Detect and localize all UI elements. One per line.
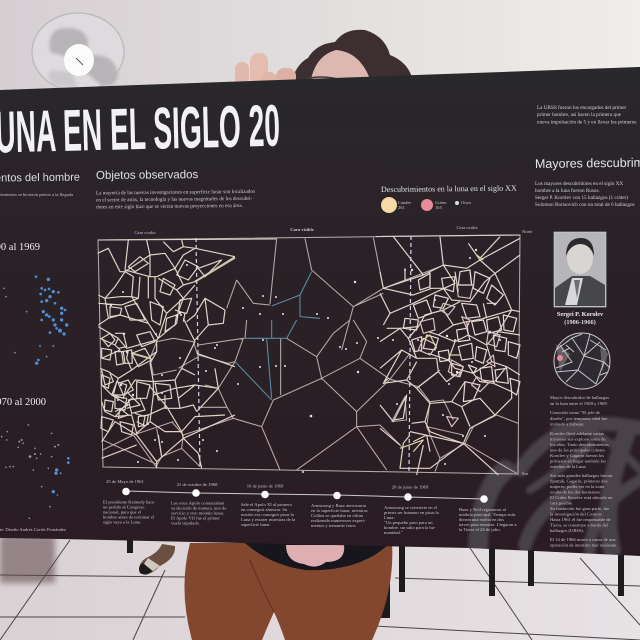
panel: right column, major discoveries (535, 104, 640, 548)
timeline event 4: mentos y tomando fotos. (311, 523, 356, 528)
person: head and hair (290, 30, 413, 85)
moon map labels: Cara visible (290, 227, 314, 232)
legend item landing: Lander (398, 200, 411, 205)
person: trousers (184, 543, 392, 640)
section paragraph: en el sector de atrás, la tecnología y las nuevas magnitudes de los descubri- (96, 196, 253, 203)
person: fingers over the board (235, 53, 296, 86)
right column body text: hallazgos (URSS). (550, 528, 584, 533)
right column body text: estudios de la Luna. (550, 464, 587, 469)
right column body text: los años. Tanto descubrimientos (550, 442, 609, 447)
timeline event 6: dieron una vuelta en dos (459, 517, 504, 522)
section heading: Objetos observados (96, 169, 199, 182)
legend: discoveries on the moon (381, 184, 517, 213)
timeline event 1: El presidente Kennedy hace (103, 500, 154, 504)
legend item crater: Cráter (435, 200, 447, 205)
background wall (0, 0, 640, 110)
timeline event 6: módulo principal. Tiempo más (459, 512, 516, 517)
right column body text: cara posible. (550, 500, 573, 506)
right column body text: misiones sus exploraciones de (550, 436, 606, 442)
section paragraph: La mayoría de las nuevas investigaciones en superficie lunar son localizados (96, 188, 255, 196)
right column body text: Korolev y Gagarin fueron los (550, 453, 604, 458)
panel: left column, lunar landings (0, 172, 80, 532)
timeline event 6: la Tierra el 24 de julio. (459, 527, 501, 532)
right column body text: invitado a trabajar. (550, 422, 584, 426)
floor (0, 530, 640, 640)
timeline event 3: Luna y extraer muestras de la (241, 517, 295, 522)
right column body text: Sus más grandes hallazgos fueron (550, 473, 613, 478)
timeline event 2: servicio y otro módulo lunar. (171, 510, 224, 516)
legend item landing: 261 (398, 205, 406, 210)
right column body text: El Cráter Korolev está ubicado en (550, 495, 613, 500)
right column body text: primeros en llegar también los (550, 458, 606, 464)
right column body text: operación de intestino mal realizada. (550, 542, 617, 548)
right column body text: mujeres, poder ver en la zona (550, 484, 604, 490)
timeline event 1 (103, 500, 155, 524)
globe of discoveries (554, 333, 610, 389)
dashed longitude lines (196, 236, 411, 473)
timeline axis (126, 491, 484, 499)
right intro text (537, 104, 636, 126)
timeline dots (122, 488, 488, 503)
timeline event 4: Armstrong y Buzz aterrizaron (311, 503, 367, 508)
timeline event 2: Los once Apolo comenzaban (171, 500, 225, 506)
observed object dots (110, 249, 501, 473)
timeline event 6: naves para reunirse. Llegaron a (459, 522, 517, 527)
timeline dates: 20 de junio de 1969 (392, 484, 429, 490)
right column body text: Hasta 1961 él fue responsable de (550, 517, 611, 522)
timeline event 2: El Apolo VII fue el primer (171, 516, 220, 520)
timeline event 2: vuelo tripulado. (171, 520, 200, 526)
right section paragraph: Los mayores descubridores en el siglo XX (535, 181, 623, 187)
right column body text: Mayor descubridor de hallazgos (550, 395, 609, 400)
timeline dates (106, 479, 429, 490)
timeline event 3: en conseguir alunizar. Su (241, 507, 288, 512)
portrait caption: (1906-1966) (564, 319, 596, 326)
portrait caption: Sergei P. Korolev (557, 311, 604, 318)
timeline event 4: realizando numerosos experi- (311, 518, 366, 523)
timeline event 3: misión era conseguir pisar la (241, 512, 294, 517)
right column body text: diseño", por temprana edad fue (550, 416, 607, 422)
timeline event 3: superficie lunar. (241, 522, 271, 527)
right section paragraph: Sergei P. Korolev con 15 hallazgos (1 cráter) (535, 194, 628, 201)
right section paragraph (535, 181, 635, 208)
timeline event 5: primer ser humano en pisar la (384, 510, 439, 515)
timeline event 5 (384, 505, 439, 535)
timeline event 5: "Un pequeño paso para un (384, 520, 433, 525)
right column body text: la investigación del Cosmos. (550, 512, 603, 516)
legend item other: Otros (461, 200, 471, 205)
central cells (227, 237, 440, 350)
person: hand below the board (286, 545, 344, 567)
right intro text: nueva impulsación de 5 y en llevar los primeros (537, 120, 636, 126)
timeline event 5: manidad." (384, 530, 403, 535)
right column body text: oculta de los dos hermanos. (550, 490, 601, 494)
blue dot map 1970 to 2000 (1, 424, 70, 519)
right column body text: Korolev llevó adelante varias (550, 431, 604, 436)
legend item crater (421, 199, 447, 211)
right column body text: Su fundación fue gran parte, fue (550, 506, 609, 512)
shoe (139, 544, 175, 575)
voronoi moon map (98, 235, 520, 475)
timeline event 6 (459, 507, 517, 532)
timeline event 4 (311, 503, 368, 528)
timeline event 2: su decisión de manera, uno de (171, 506, 226, 512)
right column body text: uno de los principales cohetes (550, 448, 605, 452)
timeline event 4: Collins se quedaba en órbita (311, 513, 363, 518)
timeline dates: 16 de junio de 1969 (247, 484, 284, 488)
moon map labels: Cara oculta (134, 230, 156, 235)
right intro text: La URSS fueron los encargados del primer (537, 104, 626, 111)
timeline event 1: un pedido al Congreso (103, 504, 145, 510)
map frame (98, 235, 520, 474)
legend item landing (381, 197, 411, 213)
right column body text: El 14 de 1966 murió a causa de una (550, 537, 616, 542)
moon map labels: Sur (522, 471, 529, 476)
timeline event 5: Armstrong se convierte en el (384, 505, 438, 510)
right section paragraph: Solomon Borisovich con un total de 6 hallazgos (535, 202, 635, 208)
wall fan (32, 13, 124, 91)
portrait caption (557, 311, 604, 326)
blue dot map 1900 to 1969 (3, 275, 68, 365)
right dense cells (380, 237, 520, 475)
timeline dates: 21 de octubre de 1968 (177, 482, 218, 487)
timeline event 6: Buzz y Neil regresaron al (459, 507, 507, 512)
right column body text: en la luna entre el 1969 y 1969 (550, 401, 607, 406)
timeline event 4: en la superficie lunar, mientras (311, 508, 368, 514)
right intro text: primer hombre, así hacen la primera que (537, 112, 622, 118)
moon map labels (134, 225, 532, 476)
timeline dates: 25 de Mayo de 1961 (106, 479, 145, 484)
timeline event 1: siglo vaya a la Luna. (103, 520, 141, 524)
timeline event 2 (171, 500, 226, 526)
section paragraph: dores en este siglo hizo que se vieran nuevas proyecciones en esa área. (96, 203, 243, 210)
portrait of Sergei Korolev (554, 232, 606, 307)
right column body text: Sputnik, Gagarin, primeros dos (550, 478, 608, 484)
poster board (0, 67, 640, 556)
moon map labels: Cara oculta (456, 225, 478, 230)
timeline event 5: hombre, un salto para la hu- (384, 525, 436, 531)
board stand legs (127, 538, 624, 618)
person: shirt (245, 543, 390, 570)
right column body text (550, 395, 617, 548)
timeline event 1: hombre antes de terminar el (103, 514, 155, 520)
legend item crater: 165 (435, 205, 443, 210)
timeline event 5: Luna: (384, 515, 395, 520)
right column body text: Tierra, se construye a bordo del (550, 522, 609, 528)
reflection on the board (478, 424, 640, 550)
right column body text: Conocido como "El jefe de (550, 410, 600, 415)
left dense cells (98, 240, 235, 468)
right section paragraph: hombre a la luna fueron Rusos. (535, 187, 600, 194)
timeline event 3: Sale el Apolo XI al primero (241, 502, 293, 507)
section paragraph (96, 188, 255, 210)
legend title: Descubrimientos en la luna en el siglo XX (381, 184, 517, 194)
panel: objetos observados intro (96, 169, 255, 210)
timeline event 3 (241, 502, 295, 527)
timeline event 1: nacional, para que el (103, 510, 142, 516)
moon map labels: Norte (522, 229, 532, 234)
timeline (103, 479, 517, 535)
